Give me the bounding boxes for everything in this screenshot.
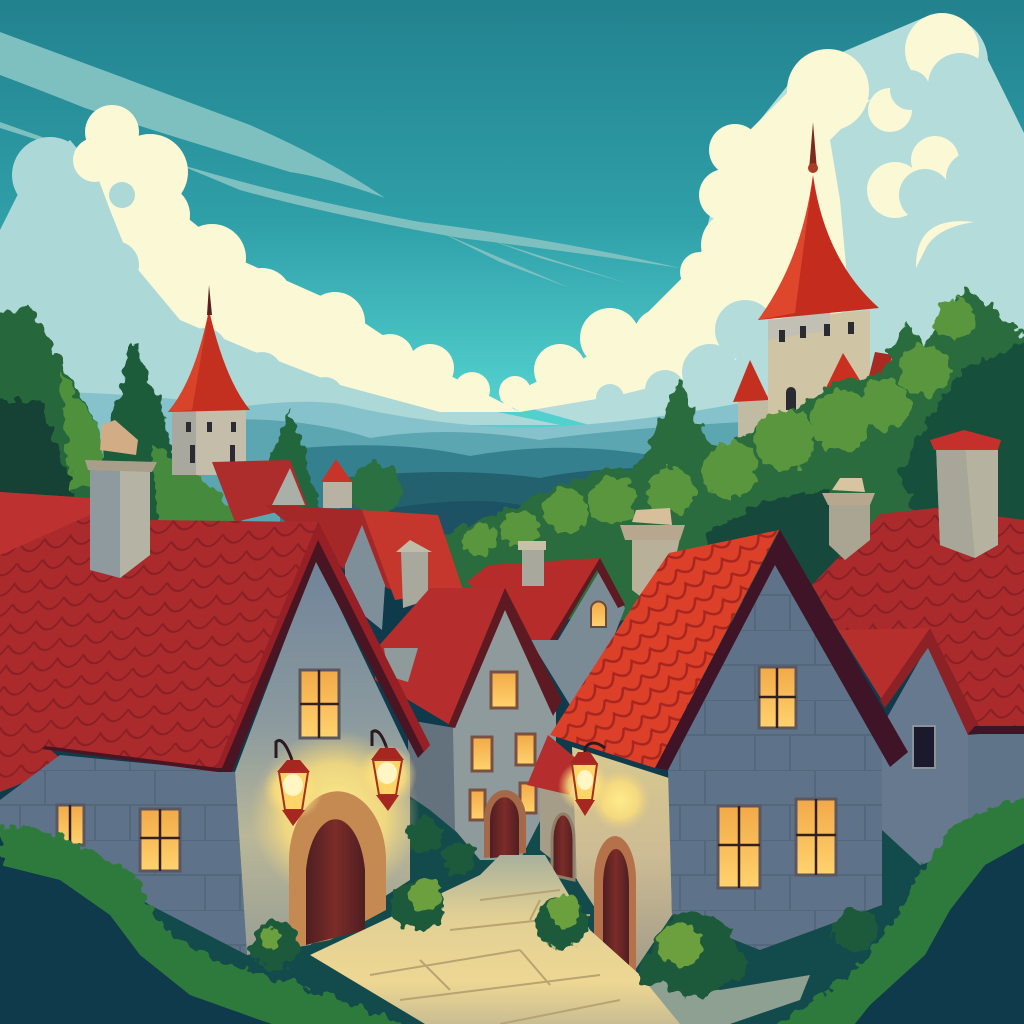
side wall [0, 755, 247, 955]
cobblestone path [310, 855, 810, 1024]
right cloud highlight [499, 13, 979, 412]
left cloud highlight [73, 105, 520, 412]
left forest [0, 305, 401, 570]
door [289, 791, 386, 948]
left cloud inner shadow [91, 182, 399, 426]
small door [552, 814, 574, 880]
left castle tower [168, 285, 250, 475]
right cloud [499, 13, 1024, 428]
small back lit wall [540, 780, 578, 880]
lit side wall [572, 747, 672, 970]
far-left roof [0, 492, 100, 792]
main roof [43, 520, 318, 772]
main roof [550, 530, 779, 768]
tree line [445, 285, 1024, 620]
center house door [484, 790, 526, 858]
right forest [445, 122, 1024, 620]
lantern [558, 743, 610, 816]
glow [590, 770, 650, 830]
left chimney [85, 420, 157, 578]
back center house [467, 541, 625, 705]
right castle [733, 122, 893, 455]
lantern left [263, 740, 323, 826]
foreground foliage left [0, 825, 420, 1024]
cirrus streaks [0, 32, 680, 288]
window lower right [796, 799, 836, 875]
left cloud shadow body [0, 137, 560, 425]
window upper [759, 667, 796, 728]
roof edge [42, 522, 430, 772]
left large house [0, 420, 430, 955]
foreground foliage right [770, 795, 1024, 1024]
background ground [0, 780, 1024, 1024]
main right house [527, 530, 908, 972]
center house small chimney [384, 648, 418, 682]
back house roofs [212, 459, 463, 630]
gable wall [668, 560, 882, 950]
side windows [140, 809, 180, 871]
small bushes [251, 817, 877, 997]
window lower left [718, 806, 760, 888]
right house [812, 508, 1024, 865]
right chimneys [620, 430, 1001, 600]
right cloud inner shadow [596, 53, 998, 412]
left cloud [0, 105, 560, 426]
upper window [300, 670, 339, 738]
door [594, 836, 636, 972]
sky background [0, 0, 1024, 560]
distant mountains [60, 392, 780, 560]
center house [375, 588, 562, 860]
roof edge [655, 530, 908, 770]
gable wall [235, 558, 410, 955]
right cloud shadow body [500, 15, 1024, 428]
lantern right [357, 731, 417, 811]
small porch roof [527, 735, 578, 795]
